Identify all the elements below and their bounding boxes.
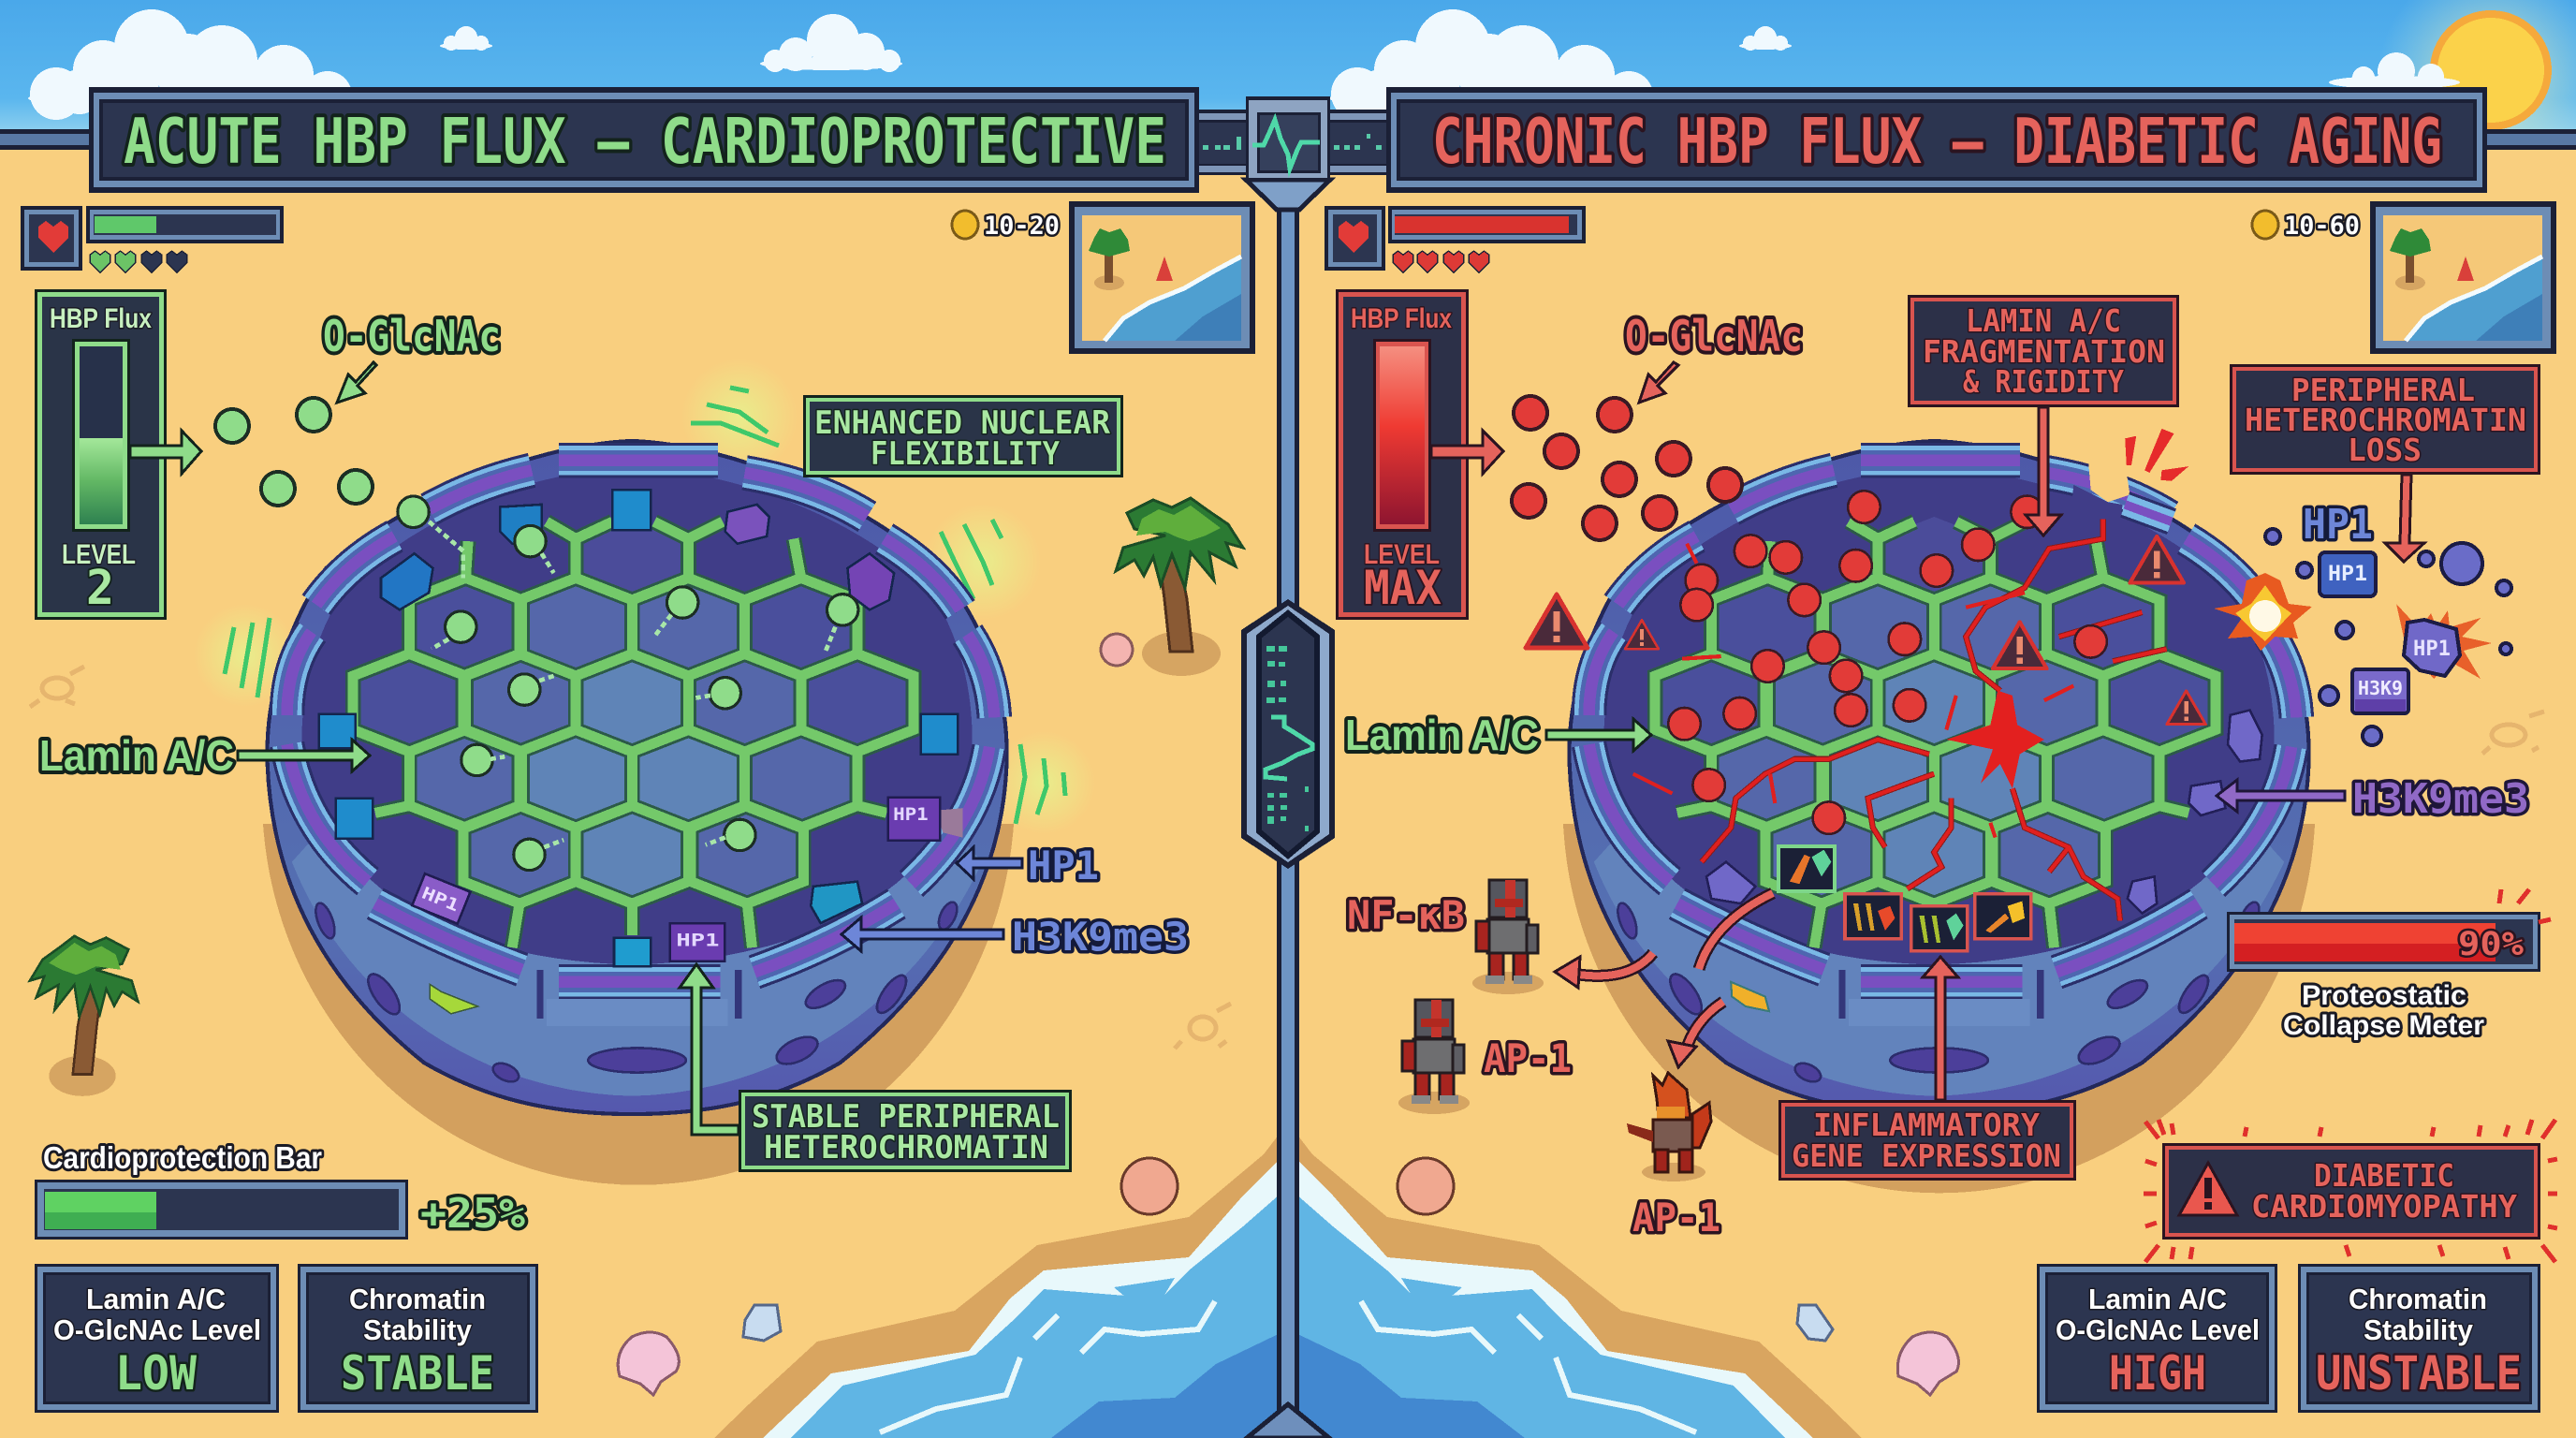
sprite: NF-kB soldier [1472,880,1544,994]
callout: stable peripheral heterochromatin [739,1090,1072,1172]
stat card: chromatin stable [298,1264,538,1413]
label: Cardioprotection Bar [43,1140,322,1175]
stat card: lamin O-GlcNAc high: O-GlcNAc Level [2056,1313,2260,1346]
small hearts [90,251,187,272]
palm tree upper [1116,498,1243,676]
H3K9 fragment tag [2352,669,2408,713]
HP1 tag: HP1 [893,805,929,825]
label: Lamin A/C left: Lamin A/C [39,731,234,780]
stat card: lamin O-GlcNAc low [35,1264,279,1413]
gauge: HBP flux left: HBP Flux [50,303,152,334]
callout: lamin fragmentation: & RIGIDITY [1963,363,2124,400]
scattered chromatin debris [2265,529,2511,745]
callout: inflammatory gene expression: GENE EXPRESSION [1792,1137,2061,1174]
gauge: HBP flux right: LEVEL [1364,539,1440,570]
O-GlcNAc dots incoming left [215,398,373,506]
gauge: HBP flux left: LEVEL [62,539,136,570]
arrow: heterochromatin loss [2385,475,2424,562]
callout: stable peripheral heterochromatin: STABLE PERIPHERAL [752,1098,1060,1136]
label: AP-1 upper: AP-1 [1484,1035,1572,1081]
stat card: chromatin unstable: UNSTABLE [2316,1346,2522,1401]
nucleus shadow right [1563,824,2315,1193]
rim rupture [2069,429,2188,541]
meter: proteostatic collapse [2227,889,2551,972]
nuclear envelope [267,441,1007,1114]
wave marks: flexibility left [194,359,1095,834]
minimap left [1069,201,1255,354]
exploding fragment: HP1 [2413,638,2451,661]
cardioprotection bar [35,1140,526,1240]
stat card: chromatin unstable: Chromatin [2349,1283,2487,1315]
HP1 tag [670,923,724,961]
clouds [28,9,2460,120]
O-GlcNAc dots [398,496,858,871]
explosion on envelope [2214,573,2312,651]
callout: enhanced nuclear flexibility [803,395,1123,477]
HP1 tag [888,798,940,841]
arrow: flux to O-GlcNAc right [1431,431,1503,474]
sky background [0,0,2576,140]
central oscilloscope module [1241,599,1335,869]
stat card: lamin O-GlcNAc low: O-GlcNAc Level [53,1313,261,1346]
gauge: HBP flux left: 2 [86,561,114,616]
label: AP-1 lower: AP-1 [1632,1195,1720,1240]
nucleus: chronic damaged lamina [1569,441,2309,1114]
label: proteostatic collapse meter: Collapse Meter [2283,1010,2484,1041]
callout: stable peripheral heterochromatin: HETEROCHROMATIN [764,1129,1048,1167]
label: H3K9me3 right: H3K9me3 [2352,775,2529,823]
stat card: lamin O-GlcNAc high [2037,1264,2277,1413]
stat card: chromatin unstable [2298,1264,2540,1413]
HP1 tag [412,873,470,924]
icon: warning triangle outside [1526,594,1588,648]
health HUD left [21,206,284,272]
warning triangles [1625,536,2205,725]
label: O-GlcNAc left: O-GlcNAc [323,311,501,361]
header connector left [1196,110,1252,175]
heart monitor module [1246,96,1330,210]
HP1 tag: HP1 [419,884,461,916]
label: H3K9me3 left: H3K9me3 [1012,914,1189,960]
arrow: H3K9me3 left [842,917,1003,951]
palm tree lower left [30,936,139,1096]
callout: enhanced nuclear flexibility: FLEXIBILITY [871,435,1060,473]
coin counter left: 10-20 [984,212,1060,241]
stat card: chromatin unstable: Stability [2364,1313,2474,1346]
seashells and stones [618,634,1958,1395]
HP1 fragment tag [2320,552,2376,596]
coin counter right [2252,211,2360,241]
icon: heart [21,206,82,271]
arrow: H3K9me3 right [2217,780,2345,812]
label: HP1 left: HP1 [1028,843,1099,888]
arrow: flux to O-GlcNAc left [130,431,201,474]
label: Lamin A/C right: Lamin A/C [1345,711,1539,759]
small hearts [1393,251,1489,272]
health bar [86,206,284,243]
coin counter left [952,211,1060,241]
header connector right [1324,110,1389,175]
damage overlay on chronic nucleus [1625,429,2262,1011]
ocean shoreline [714,1123,1862,1438]
gauge: HBP flux left [35,289,167,620]
stat card: lamin O-GlcNAc high: Lamin A/C [2088,1283,2227,1315]
arrow: stable heterochromatin [680,964,739,1135]
curved arrows inner [1555,893,1773,1067]
bar track [35,1180,408,1240]
stat card: lamin O-GlcNAc low: Lamin A/C [86,1283,226,1315]
stat card: lamin O-GlcNAc high: HIGH [2109,1346,2206,1401]
arrow: HP1 left [957,847,1022,879]
arrow: Lamin A/C right [1546,719,1651,751]
arrow: lamin fragmentation [2026,407,2061,536]
lamin honeycomb [353,517,914,947]
O-GlcNAc dots incoming right [1512,396,1742,540]
callout: peripheral heterochromatin loss: LOSS [2348,432,2422,468]
yellow sliver [1731,982,1769,1011]
sand doodles [30,667,2544,1049]
alert: diabetic cardiomyopathy: DIABETIC [2314,1157,2454,1194]
label: O-GlcNAc right: O-GlcNAc [1625,311,1803,361]
chromatin blocks [319,490,962,966]
O-GlcNAc overload dots [1668,469,2107,834]
attachment trails [429,521,835,847]
value: +25% [420,1190,526,1238]
coin counter right: 10-60 [2284,212,2360,241]
stat card: chromatin stable: Stability [363,1313,473,1346]
meter: proteostatic collapse: 90% [2458,926,2524,963]
HP1 tag: HP1 [676,932,719,951]
gauge: HBP flux right: HBP Flux [1351,303,1452,334]
callout: inflammatory gene expression: INFLAMMATORY [1813,1107,2040,1143]
arrow: Lamin A/C left [238,740,370,771]
arrow: to gene expression [1923,957,1958,1100]
HP1 fragment tag: HP1 [2328,563,2367,586]
label: proteostatic collapse meter [2283,980,2484,1041]
callout: enhanced nuclear flexibility: ENHANCED NUCLEAR [814,404,1111,442]
callout: peripheral heterochromatin loss [2230,364,2540,475]
health bar [1388,206,1586,243]
title text: ACUTE HBP FLUX – CARDIOPROTECTIVE [124,105,1166,178]
callout: peripheral heterochromatin loss: HETEROCHROMATIN [2245,402,2526,438]
lamin cracks [1702,520,2167,920]
stat card: chromatin stable: Chromatin [349,1283,486,1315]
central divider spine [1247,187,1329,1438]
sprite: AP-1 orange soldier [1627,1073,1711,1181]
arrow: O-GlcNAc pointer right [1639,362,1678,403]
panel: acute title banner [89,87,1199,193]
lamin honeycomb [1655,517,2216,947]
nuclear envelope [1569,441,2309,1114]
green sliver [430,984,478,1014]
nucleus shadow left [263,824,1014,1185]
label: HP1 right: HP1 [2303,501,2373,549]
icon: warning [2179,1163,2237,1215]
sprite: AP-1 soldier [1398,1000,1470,1114]
callout: lamin fragmentation: LAMIN A/C [1966,302,2121,339]
health HUD right [1325,206,1586,272]
horizon rail [0,129,2576,150]
exploding fragment [2396,604,2492,679]
alert: diabetic cardiomyopathy [2144,1120,2557,1262]
callout: lamin fragmentation: FRAGMENTATION [1923,333,2165,370]
minimap right [2370,201,2556,354]
gene icon tiles [1778,846,2031,951]
stat card: lamin O-GlcNAc low: LOW [115,1346,198,1401]
icon: heart [1325,206,1385,271]
curved arrows: transcription factors [1573,893,1773,1053]
callout: lamin fragmentation [1908,295,2179,407]
callout: inflammatory gene expression [1778,1100,2076,1181]
alert: diabetic cardiomyopathy: CARDIOMYOPATHY [2251,1188,2517,1225]
label: proteostatic collapse meter: Proteostatic [2302,980,2466,1011]
stat card: chromatin stable: STABLE [341,1346,494,1401]
sun [2378,0,2576,187]
label: NF-kB: NF-κB [1347,892,1465,938]
chromatin remnants [1706,711,2262,914]
H3K9 fragment tag: H3K9 [2358,677,2403,699]
callout: peripheral heterochromatin loss: PERIPHERAL [2291,372,2475,408]
panel: chronic title banner [1386,87,2487,193]
gauge: HBP flux right [1336,289,1469,620]
arrow: O-GlcNAc pointer left [337,362,376,403]
gauge: HBP flux right: MAX [1364,561,1442,615]
nucleus: acute healthy lamina [267,441,1007,1114]
